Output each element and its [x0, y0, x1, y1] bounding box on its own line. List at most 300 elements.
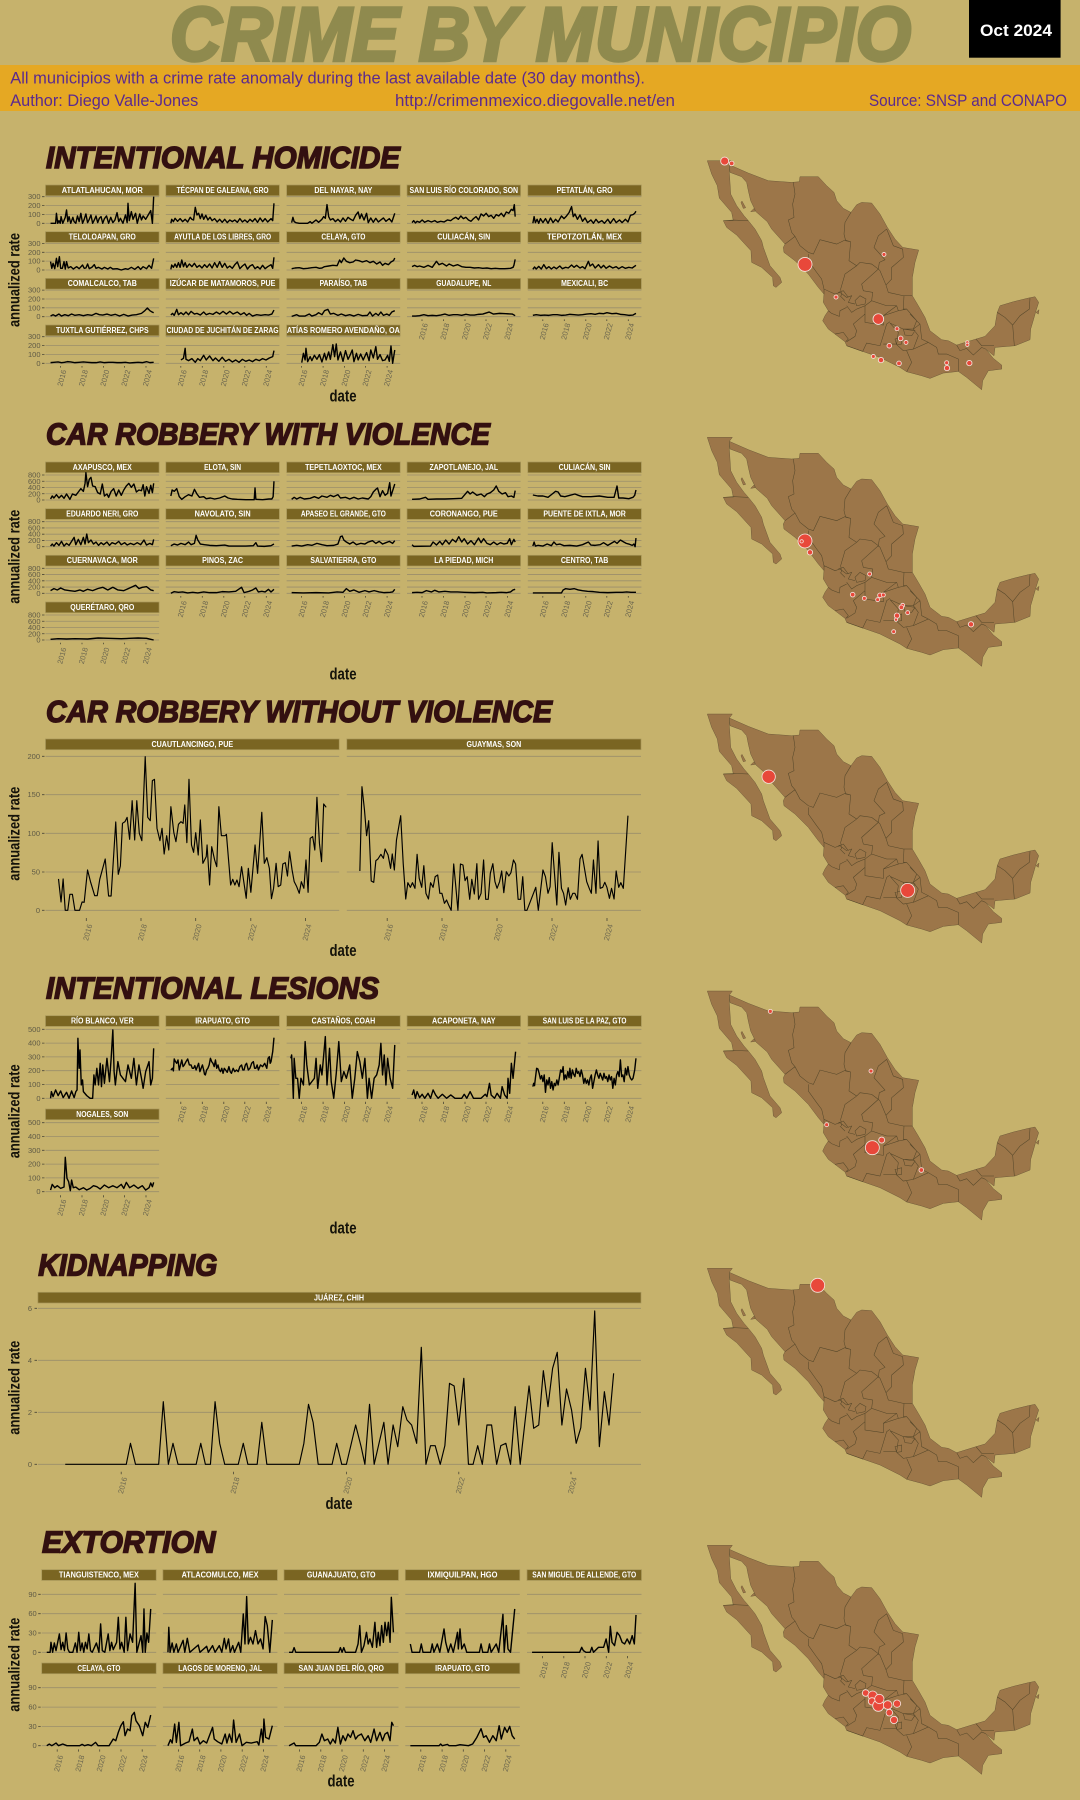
panel: Paraíso: PARAÍSO, TAB — [320, 278, 367, 288]
heading: car robbery with violence: CAR ROBBERY WITH VIOLENCE — [46, 418, 492, 452]
panel: Eduardo Neri: 600 — [28, 523, 40, 532]
panel: Petatlán: PETATLÁN, GRO — [557, 185, 613, 195]
panel: Cuernavaca: 0 — [36, 589, 40, 598]
panel: Río Blanco: 0 — [36, 1094, 40, 1103]
panel: Comalcalco: 100 — [28, 303, 40, 312]
panel: San Luis de la Paz: 2024 — [623, 1105, 636, 1123]
heading: intentional homicide: INTENTIONAL HOMICIDE — [46, 141, 402, 175]
panel: Cuautlancingo — [27, 739, 339, 942]
x axis label: date — [328, 1772, 354, 1791]
panel: Elota: ELOTA, SIN — [204, 462, 241, 472]
panel: Irapuato: 2016 — [176, 1105, 189, 1123]
panel: Celaya — [287, 232, 400, 270]
panel: Atlatlahucan: 0 — [36, 219, 40, 228]
panel: Tuxtla Gutiérrez: 2022 — [119, 369, 132, 387]
panel: Irapuato: 2020 — [458, 1754, 471, 1773]
panel: Teloloapan — [28, 232, 159, 274]
panel: Salvatierra: 2022 — [361, 600, 374, 618]
panel: Lagos de Moreno: LAGOS DE MORENO, JAL — [178, 1663, 262, 1673]
panel: Teloloapan: 100 — [28, 257, 40, 266]
panel: Querétaro: 2024 — [141, 646, 154, 665]
panel: Salvatierra: 2024 — [382, 600, 395, 618]
panel: Nogales: 300 — [28, 1146, 40, 1155]
panel: Nogales — [28, 1109, 159, 1217]
panel: Teloloapan: 200 — [28, 248, 40, 257]
info band: All municipios with a crime rate anomaly during the last available date (30 day months). — [10, 68, 645, 87]
panel: Cuautlancingo: CUAUTLANCINGO, PUE — [152, 739, 233, 749]
panel: Atlacomulco — [163, 1570, 277, 1652]
panel: Celaya: CELAYA, GTO — [321, 232, 366, 242]
panel: La Piedad: 2016 — [417, 600, 430, 618]
panel: Centro: 2020 — [581, 600, 594, 618]
panel: Salvatierra: 2018 — [318, 600, 331, 618]
panel: Nogales: 200 — [28, 1160, 40, 1169]
panel: San Luis de la Paz: 2022 — [602, 1105, 615, 1123]
panel: Cuautlancingo: 150 — [27, 790, 40, 799]
panel: Izúcar de Matamoros — [166, 277, 279, 317]
panel: San Miguel de Allende: 2022 — [601, 1661, 614, 1679]
panel: Tepetlaoxtoc: TEPETLAOXTOC, MEX — [305, 462, 382, 472]
panel: Eduardo Neri — [28, 508, 159, 551]
panel: Guaymas: 2020 — [492, 923, 505, 942]
section: car robbery without violence — [6, 695, 641, 960]
panel: San Miguel de Allende — [527, 1570, 642, 1679]
panel: Irapuato: IRAPUATO, GTO — [195, 1016, 250, 1026]
panel: Cuautlancingo: 50 — [32, 868, 40, 876]
panel: Cuernavaca — [28, 555, 159, 598]
panel: Axapusco: 200 — [28, 489, 40, 498]
panel: San Luis de la Paz: SAN LUIS DE LA PAZ, GTO — [543, 1016, 627, 1026]
panel: Ciudad de Juchitán de Zaragoza — [166, 325, 279, 387]
panel: Paraíso — [287, 278, 400, 317]
heading: extortion: EXTORTION — [42, 1525, 216, 1559]
panel: Irapuato: IRAPUATO, GTO — [435, 1663, 490, 1673]
panel: Matías Romero Avendaño: 2016 — [297, 369, 310, 387]
panel: Juárez: 6 — [28, 1304, 32, 1313]
panel: Guadalupe: 2020 — [460, 322, 473, 341]
panel: Salvatierra: 2016 — [297, 600, 310, 618]
x axis label: date — [330, 941, 356, 960]
panel: San Juan del Río: 2020 — [337, 1754, 350, 1773]
panel: Tuxtla Gutiérrez: 200 — [28, 341, 40, 350]
panel: San Luis de la Paz: 2018 — [559, 1105, 572, 1123]
panel: Zapotlanejo: ZAPOTLANEJO, JAL — [430, 462, 498, 472]
panel: Juárez — [28, 1292, 641, 1495]
panel: San Luis de la Paz — [528, 1016, 641, 1123]
panel: Celaya: 2024 — [137, 1754, 150, 1773]
panel: Mexicali: MEXICALI, BC — [561, 278, 608, 288]
panel: San Miguel de Allende: 2024 — [622, 1661, 635, 1679]
panel: San Luis de la Paz: 2020 — [581, 1105, 594, 1123]
panel: Axapusco: 400 — [28, 483, 40, 492]
map: car robbery with violence — [707, 437, 1039, 666]
panel: Matías Romero Avendaño: 2024 — [382, 369, 395, 387]
panel: Lagos de Moreno — [163, 1663, 277, 1773]
panel: Cuautlancingo: 200 — [27, 752, 40, 761]
panel: Irapuato: 2020 — [219, 1105, 232, 1123]
panel: Mexicali: 2024 — [623, 322, 636, 341]
panel: La Piedad: 2020 — [460, 600, 473, 618]
panel: Eduardo Neri: 0 — [36, 542, 40, 551]
panel: Tianguistenco: 60 — [28, 1609, 37, 1618]
panel: Celaya: 2020 — [95, 1754, 108, 1773]
panel: Guanajuato: GUANAJUATO, GTO — [307, 1570, 376, 1580]
panel: Técpan de Galeana — [166, 185, 279, 223]
panel: San Miguel de Allende: 2018 — [559, 1661, 572, 1679]
panel: Pinos: PINOS, ZAC — [202, 555, 243, 565]
panel: Axapusco: 0 — [36, 496, 40, 504]
panel: Ciudad de Juchitán de Zaragoza: 2022 — [240, 369, 253, 387]
panel: Río Blanco: 100 — [28, 1080, 40, 1089]
panel: Guadalupe: 2016 — [417, 322, 430, 341]
panel: Cuernavaca: 600 — [28, 570, 40, 579]
panel: Tepotzotlán — [528, 232, 641, 270]
panel: Centro: 2024 — [623, 600, 636, 618]
section: intentional homicide — [6, 141, 641, 406]
panel: Río Blanco: RÍO BLANCO, VER — [71, 1016, 134, 1026]
panel: Salvatierra: 2020 — [340, 600, 353, 618]
y axis label: annualized rate — [6, 1618, 24, 1712]
panel: La Piedad — [407, 555, 521, 618]
panel: Matías Romero Avendaño — [287, 325, 400, 387]
panel: San Luis Río Colorado — [407, 185, 521, 223]
panel: Tuxtla Gutiérrez: 300 — [28, 332, 40, 341]
panel: Irapuato: 2018 — [437, 1754, 450, 1773]
panel: Mexicali: 2022 — [602, 322, 615, 341]
panel: Cuautlancingo: 2024 — [301, 923, 314, 942]
panel: Celaya: CELAYA, GTO — [77, 1663, 121, 1673]
panel: Acaponeta: 2022 — [481, 1105, 494, 1123]
info band — [0, 65, 1080, 111]
panel: Puente de Ixtla: PUENTE DE IXTLA, MOR — [543, 509, 626, 519]
panel: Juárez: JUÁREZ, CHIH — [314, 1292, 364, 1302]
panel: Pinos: 2022 — [240, 600, 253, 618]
panel: Apaseo el Grande — [287, 508, 400, 547]
panel: Navolato — [166, 508, 279, 547]
panel: Tuxtla Gutiérrez: 2018 — [77, 369, 90, 387]
panel: Irapuato: 2016 — [416, 1754, 429, 1773]
x axis label: date — [326, 1494, 352, 1513]
panel: Salvatierra: SALVATIERRA, GTO — [310, 555, 377, 565]
panel: Pinos — [166, 555, 279, 618]
panel: Eduardo Neri: 400 — [28, 530, 40, 539]
panel: Cuautlancingo: 2022 — [246, 923, 259, 942]
panel: Celaya: 2022 — [116, 1754, 129, 1773]
panel: Cuautlancingo: 0 — [36, 906, 40, 915]
panel: Tuxtla Gutiérrez: 0 — [36, 359, 40, 368]
panel: Del Nayar — [287, 185, 400, 223]
panel: Guadalupe: 2024 — [502, 322, 515, 341]
panel: Axapusco: AXAPUSCO, MEX — [73, 462, 132, 472]
panel: Ciudad de Juchitán de Zaragoza: CIUDAD DE JUCHITÁN DE ZARAG — [167, 325, 279, 335]
panel: Río Blanco: 200 — [28, 1066, 40, 1075]
panel: Lagos de Moreno: 2022 — [237, 1754, 250, 1773]
heading: kidnapping: KIDNAPPING — [38, 1249, 217, 1283]
panel: Tuxtla Gutiérrez — [28, 325, 159, 387]
panel: Centro: CENTRO, TAB — [561, 555, 608, 565]
panel: Coronango: CORONANGO, PUE — [430, 509, 498, 519]
panel: San Miguel de Allende: SAN MIGUEL DE ALLENDE, GTO — [532, 1570, 636, 1580]
panel: Acaponeta — [407, 1016, 521, 1123]
panel: San Miguel de Allende: 2020 — [580, 1661, 593, 1679]
panel: Castaños — [287, 1016, 400, 1123]
panel: Guaymas: GUAYMAS, SON — [467, 739, 521, 749]
panel: San Juan del Río: 2018 — [316, 1754, 329, 1773]
panel: Atlatlahucan: 300 — [28, 192, 40, 201]
panel: Mexicali — [528, 278, 641, 341]
y axis label: annualized rate — [6, 1341, 24, 1435]
info band: http://crimenmexico.diegovalle.net/en — [395, 91, 675, 110]
panel: Ciudad de Juchitán de Zaragoza: 2020 — [219, 369, 232, 387]
panel: Zapotlanejo — [407, 462, 521, 500]
panel: Guaymas: 2024 — [602, 923, 615, 942]
panel: Guadalupe: 2022 — [481, 322, 494, 341]
panel: Río Blanco — [28, 1016, 159, 1103]
panel: San Luis Río Colorado: SAN LUIS RÍO COLORADO, SON — [410, 185, 518, 195]
panel: La Piedad: LA PIEDAD, MICH — [434, 555, 493, 565]
panel: San Juan del Río — [284, 1663, 398, 1773]
panel: Matías Romero Avendaño: ATÍAS ROMERO AVENDAÑO, OA — [287, 325, 400, 335]
panel: Ciudad de Juchitán de Zaragoza: 2016 — [176, 369, 189, 387]
panel: Tepotzotlán: TEPOTZOTLÁN, MEX — [547, 232, 622, 242]
panel: Castaños: 2020 — [340, 1105, 353, 1123]
panel: Irapuato — [405, 1663, 520, 1773]
heading: car robbery without violence: CAR ROBBERY WITHOUT VIOLENCE — [46, 695, 554, 729]
panel: Comalcalco — [28, 278, 159, 321]
panel: Tianguistenco: 30 — [28, 1629, 37, 1638]
panel: Juárez: 2018 — [229, 1476, 242, 1495]
panel: Culiacán — [528, 462, 641, 500]
panel: Cuautlancingo: 2020 — [191, 923, 204, 942]
panel: Atlatlahucan: 100 — [28, 210, 40, 219]
panel: Tepetlaoxtoc — [287, 462, 400, 500]
panel: Comalcalco: COMALCALCO, TAB — [68, 278, 137, 288]
panel: Pinos: 2024 — [261, 600, 274, 618]
panel: Ixmiquilpan — [405, 1570, 520, 1652]
y axis label: annualized rate — [6, 787, 24, 881]
panel: Comalcalco: 200 — [28, 295, 40, 304]
panel: Juárez: 2016 — [116, 1476, 129, 1495]
panel: Teloloapan: 0 — [36, 266, 40, 274]
panel: Guadalupe: GUADALUPE, NL — [436, 278, 491, 288]
panel: Irapuato: 2022 — [480, 1754, 493, 1773]
panel: Acaponeta: 2024 — [502, 1105, 515, 1123]
panel: Acaponeta: 2018 — [438, 1105, 451, 1123]
panel: Ayutla de los Libres — [166, 232, 279, 270]
panel: Lagos de Moreno: 2016 — [173, 1754, 186, 1773]
panel: Centro: 2018 — [559, 600, 572, 618]
panel: Tuxtla Gutiérrez: 100 — [28, 350, 40, 359]
panel: Celaya: 2016 — [52, 1754, 65, 1773]
panel: Culiacán — [407, 232, 521, 270]
map: intentional homicide — [707, 157, 1039, 390]
panel: Querétaro: QUERÉTARO, QRO — [70, 602, 135, 612]
x axis label: date — [330, 1218, 356, 1237]
panel: Nogales: NOGALES, SON — [76, 1109, 128, 1119]
panel: Querétaro: 0 — [36, 636, 40, 644]
panel: Acaponeta: 2016 — [417, 1105, 430, 1123]
panel: Pinos: 2018 — [197, 600, 210, 618]
panel: Juárez: 2022 — [454, 1476, 467, 1495]
panel: Teloloapan: TELOLOAPAN, GRO — [69, 232, 136, 242]
section: extortion — [6, 1525, 642, 1791]
section: car robbery with violence — [6, 418, 641, 683]
panel: Tianguistenco — [28, 1570, 156, 1657]
panel: Culiacán: CULIACÁN, SIN — [559, 462, 611, 472]
panel: Nogales: 400 — [28, 1132, 40, 1141]
panel: Castaños: CASTAÑOS, COAH — [312, 1016, 375, 1026]
panel: Mexicali: 2016 — [538, 322, 551, 341]
panel: Eduardo Neri: 800 — [28, 517, 40, 526]
y axis label: annualized rate — [6, 233, 24, 327]
panel: Guaymas — [347, 739, 641, 942]
panel: Irapuato — [166, 1016, 279, 1123]
panel: Querétaro: 2018 — [77, 646, 90, 665]
panel: Nogales: 2024 — [141, 1198, 154, 1217]
panel: Navolato: NAVOLATO, SIN — [195, 509, 251, 519]
panel: San Juan del Río: 2024 — [379, 1754, 392, 1773]
panel: Querétaro: 2020 — [98, 646, 111, 665]
panel: Celaya: 30 — [28, 1722, 37, 1731]
panel: Cuernavaca: CUERNAVACA, MOR — [67, 555, 138, 565]
panel: Cuernavaca: 200 — [28, 583, 40, 592]
panel: Centro — [528, 555, 641, 618]
panel: Coronango — [407, 508, 521, 547]
panel: Ciudad de Juchitán de Zaragoza: 2018 — [197, 369, 210, 387]
panel: Celaya: 0 — [33, 1741, 37, 1750]
panel: Celaya: 90 — [28, 1683, 37, 1692]
panel: Irapuato: 2024 — [501, 1754, 514, 1773]
panel: Ciudad de Juchitán de Zaragoza: 2024 — [261, 369, 274, 387]
panel: Tianguistenco: TIANGUISTENCO, MEX — [59, 1570, 139, 1580]
panel: Ayutla de los Libres: AYUTLA DE LOS LIBRES, GRO — [174, 232, 271, 242]
panel: Querétaro — [28, 602, 159, 665]
panel: Juárez: 4 — [28, 1356, 32, 1365]
panel: Nogales: 2016 — [55, 1198, 68, 1217]
panel: Apaseo el Grande: APASEO EL GRANDE, GTO — [301, 509, 386, 519]
panel: Juárez: 2020 — [341, 1476, 354, 1495]
panel: San Juan del Río: SAN JUAN DEL RÍO, QRO — [298, 1663, 384, 1673]
panel: Axapusco: 800 — [28, 470, 40, 480]
panel: Elota — [166, 462, 279, 500]
panel: Matías Romero Avendaño: 2018 — [318, 369, 331, 387]
y axis label: annualized rate — [6, 510, 24, 604]
panel: Querétaro: 800 — [28, 610, 40, 620]
panel: Cuautlancingo: 100 — [27, 829, 40, 838]
panel: Acaponeta: 2020 — [460, 1105, 473, 1123]
panel: Matías Romero Avendaño: 2022 — [361, 369, 374, 387]
panel: Juárez: 2024 — [566, 1476, 579, 1495]
panel: Centro: 2022 — [602, 600, 615, 618]
section: intentional lesions — [6, 972, 641, 1237]
panel: Irapuato: 2018 — [197, 1105, 210, 1123]
panel: Teloloapan: 300 — [28, 239, 40, 248]
panel: Axapusco: 600 — [28, 477, 40, 486]
panel: La Piedad: 2022 — [481, 600, 494, 618]
panel: Castaños: 2018 — [318, 1105, 331, 1123]
panel: Lagos de Moreno: 2020 — [216, 1754, 229, 1773]
info band: Author: Diego Valle-Jones — [10, 91, 198, 110]
panel: Cuernavaca: 800 — [28, 564, 40, 573]
panel: Irapuato: 2022 — [240, 1105, 253, 1123]
panel: Pinos: 2020 — [219, 600, 232, 618]
panel: Cuautlancingo: 2018 — [136, 923, 149, 942]
map: extortion — [707, 1545, 1039, 1774]
panel: Cuautlancingo: 2016 — [81, 923, 94, 942]
panel: Juárez: 2 — [28, 1408, 32, 1417]
panel: Tianguistenco: 0 — [33, 1648, 37, 1657]
heading: intentional lesions: INTENTIONAL LESIONS — [46, 972, 380, 1006]
panel: Salvatierra — [287, 555, 400, 618]
panel: Comalcalco: 0 — [36, 312, 40, 321]
x axis label: date — [330, 387, 356, 406]
panel: Nogales: 2018 — [77, 1198, 90, 1217]
panel: Guaymas: 2016 — [382, 923, 395, 942]
y axis label: annualized rate — [6, 1064, 24, 1158]
panel: Guaymas: 2022 — [547, 923, 560, 942]
panel: Mexicali: 2018 — [559, 322, 572, 341]
date badge: Oct 2024 — [980, 21, 1053, 40]
panel: Irapuato: 2024 — [261, 1105, 274, 1123]
section: kidnapping — [6, 1249, 641, 1513]
panel: Puente de Ixtla — [528, 508, 641, 547]
panel: Lagos de Moreno: 2018 — [195, 1754, 208, 1773]
panel: Querétaro: 2016 — [55, 646, 68, 665]
panel: Técpan de Galeana: TÉCPAN DE GALEANA, GRO — [177, 185, 269, 195]
panel: Cuernavaca: 400 — [28, 576, 40, 585]
panel: Acaponeta: ACAPONETA, NAY — [432, 1016, 496, 1026]
panel: Tuxtla Gutiérrez: 2020 — [98, 369, 111, 387]
panel: Axapusco — [28, 462, 159, 504]
panel: Río Blanco: 300 — [28, 1052, 40, 1061]
panel: Nogales: 2022 — [119, 1198, 132, 1217]
panel: Tuxtla Gutiérrez: 2016 — [55, 369, 68, 387]
panel: Del Nayar: DEL NAYAR, NAY — [314, 185, 373, 195]
date badge — [969, 0, 1061, 58]
panel: Tuxtla Gutiérrez: 2024 — [141, 369, 154, 387]
x axis label: date — [330, 664, 356, 683]
panel: Guadalupe: 2018 — [438, 322, 451, 341]
panel: La Piedad: 2024 — [502, 600, 515, 618]
panel: Culiacán: CULIACÁN, SIN — [437, 232, 490, 242]
panel: Ixmiquilpan: IXMIQUILPAN, HGO — [427, 1570, 498, 1580]
panel: Guadalupe — [407, 278, 521, 341]
panel: Petatlán — [528, 185, 641, 223]
panel: Celaya: 2018 — [73, 1754, 86, 1773]
panel: Río Blanco: 500 — [28, 1025, 40, 1034]
panel: San Juan del Río: 2016 — [294, 1754, 307, 1773]
panel: Centro: 2016 — [538, 600, 551, 618]
panel: Guanajuato — [284, 1570, 398, 1652]
panel: Castaños: 2016 — [297, 1105, 310, 1123]
panel: Querétaro: 2022 — [119, 646, 132, 665]
panel: San Luis de la Paz: 2016 — [538, 1105, 551, 1123]
panel: Juárez: 0 — [28, 1460, 32, 1469]
panel: Lagos de Moreno: 2024 — [258, 1754, 271, 1773]
panel: Eduardo Neri: EDUARDO NERI, GRO — [66, 509, 139, 519]
panel: Castaños: 2022 — [361, 1105, 374, 1123]
panel: Atlatlahucan: 200 — [28, 201, 40, 210]
panel: Atlatlahucan: ATLATLAHUCAN, MOR — [62, 185, 143, 195]
map: car robbery without violence — [707, 714, 1039, 943]
panel: Castaños: 2024 — [382, 1105, 395, 1123]
panel: Atlacomulco: ATLACOMULCO, MEX — [182, 1570, 259, 1580]
panel: Comalcalco: 300 — [28, 286, 40, 295]
panel: Matías Romero Avendaño: 2020 — [340, 369, 353, 387]
panel: Izúcar de Matamoros: IZÚCAR DE MATAMOROS, PUE — [170, 277, 276, 288]
panel: Tianguistenco: 90 — [28, 1590, 37, 1599]
panel: Querétaro: 600 — [28, 617, 40, 626]
